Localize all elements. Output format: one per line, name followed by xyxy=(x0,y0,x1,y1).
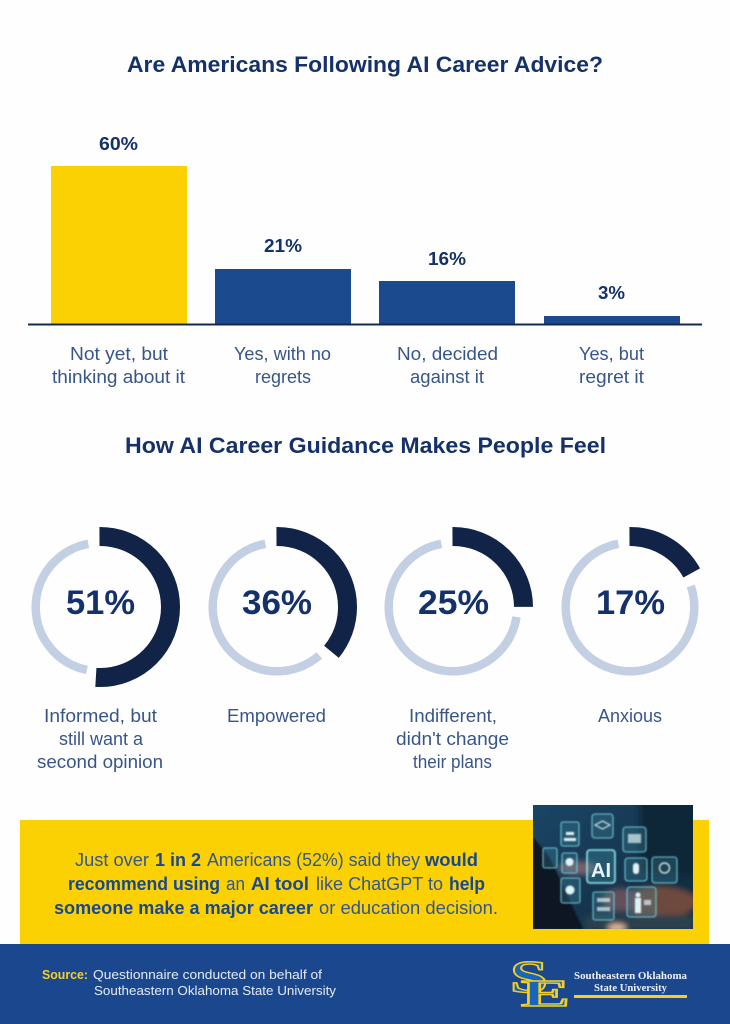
category label: not yet xyxy=(52,344,185,387)
source note: Source: xyxy=(42,967,88,982)
callout text: an xyxy=(226,874,245,894)
category label: no, decided against: against it xyxy=(410,367,484,387)
donut: 25% indifferent: 25% xyxy=(418,584,489,622)
bar: not yet, 60%: 60% xyxy=(99,133,138,154)
callout text: Americans (52%) said they xyxy=(207,850,420,870)
logo: Southeastern Oklahoma State University: State University xyxy=(594,982,667,994)
label: still want a xyxy=(59,729,144,749)
bar: regret it, 3%: 3% xyxy=(598,282,625,303)
photo: AI icons over laptop xyxy=(533,800,700,932)
callout text: or education decision. xyxy=(319,898,498,918)
title: Are Americans Following AI Career Advice?: Are Americans Following AI Career Advice? xyxy=(127,52,603,77)
callout text: would xyxy=(424,850,478,870)
label xyxy=(37,706,163,772)
callout text xyxy=(54,850,498,918)
category label: yes with no regrets: Yes, with no xyxy=(234,344,331,364)
source note xyxy=(42,967,337,998)
logo monogram: SE: S xyxy=(510,951,548,1002)
label: Empowered xyxy=(227,706,326,726)
donut: 17% anxious xyxy=(560,536,700,726)
logo monogram: SE: E xyxy=(521,973,570,1015)
source note: Southeastern Oklahoma State University xyxy=(94,983,337,998)
category label: yes with no regrets xyxy=(234,344,331,387)
callout text: help xyxy=(449,874,485,894)
category label: yes but regret: regret it xyxy=(579,367,644,387)
callout text: someone make a major career xyxy=(54,898,313,918)
donut: 36% empowered: 36% xyxy=(242,584,312,622)
category label: not yet: thinking about it xyxy=(52,367,185,387)
donut: 17% anxious: 17% xyxy=(596,584,665,622)
donut: 25% indifferent xyxy=(382,536,524,772)
label: second opinion xyxy=(37,752,163,772)
label xyxy=(396,706,509,772)
source note: Questionnaire conducted on behalf of xyxy=(93,967,322,982)
category label: yes but regret xyxy=(579,344,644,387)
callout text: 1 in 2 xyxy=(155,850,201,870)
bar chart: following AI career advice xyxy=(28,133,702,387)
category label: not yet: Not yet, but xyxy=(70,344,168,364)
donut: 36% empowered xyxy=(206,536,348,726)
category label: no, decided against xyxy=(397,344,498,387)
bar: decided against, 16% xyxy=(379,248,515,324)
callout text: AI tool xyxy=(251,874,309,894)
callout text: Just over xyxy=(75,850,149,870)
label: Informed, but xyxy=(44,706,157,726)
category label: no, decided against: No, decided xyxy=(397,344,498,364)
donut: 51% informed: 51% xyxy=(66,584,135,622)
bar: yes no regrets, 21%: 21% xyxy=(264,235,302,256)
callout panel: yellow band xyxy=(20,820,709,945)
callout text: recommend using xyxy=(68,874,220,894)
bar: not yet, 60% xyxy=(51,133,187,324)
logo: Southeastern Oklahoma State University xyxy=(510,951,687,1015)
category label: yes with no regrets: regrets xyxy=(255,367,311,387)
logo monogram: SE xyxy=(510,951,570,1015)
footer band xyxy=(0,944,730,1024)
label: their plans xyxy=(413,752,492,772)
label: Indifferent, xyxy=(409,706,497,726)
logo: Southeastern Oklahoma State University: Southeastern Oklahoma xyxy=(574,970,687,982)
heading: How AI Career Guidance Makes People Feel: How AI Career Guidance Makes People Feel xyxy=(125,433,606,458)
callout text: like ChatGPT to xyxy=(316,874,443,894)
bar: decided against, 16%: 16% xyxy=(428,248,466,269)
bar: regret it, 3% xyxy=(544,282,680,324)
icon text: AI: AI xyxy=(591,860,611,882)
label: Anxious xyxy=(598,706,662,726)
donut: 51% informed xyxy=(30,536,170,772)
label: didn't change xyxy=(396,729,509,749)
bar: yes no regrets, 21% xyxy=(215,235,351,324)
category label: yes but regret: Yes, but xyxy=(579,344,644,364)
